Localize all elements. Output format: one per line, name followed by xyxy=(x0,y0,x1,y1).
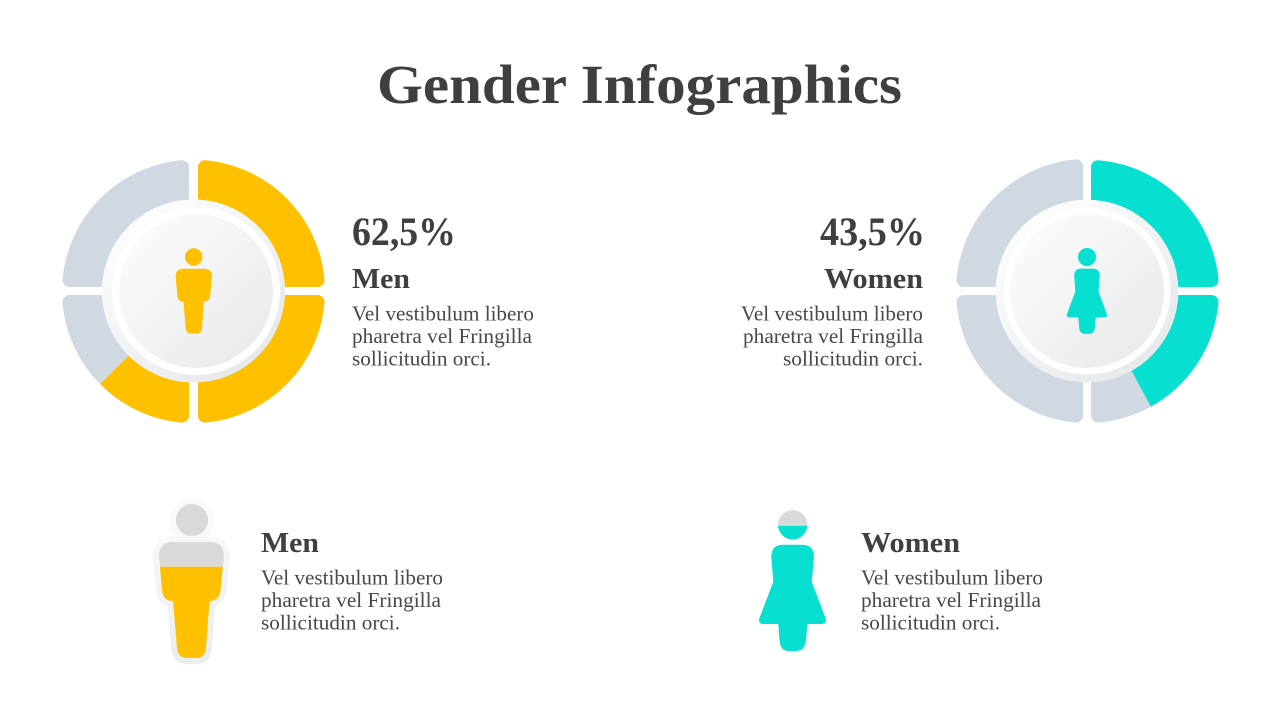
center disc xyxy=(102,199,285,383)
segment: bottom left grey xyxy=(956,295,1083,423)
text block: women description: pharetra vel Fringilla xyxy=(861,588,1042,612)
segment: bottom right teal xyxy=(1091,295,1218,407)
segment: bottom left yellow xyxy=(100,295,189,423)
segment: bottom left grey xyxy=(62,295,189,384)
text block: women stat xyxy=(741,209,925,370)
segment: top right teal xyxy=(1091,160,1218,287)
text block: women description xyxy=(861,527,1043,634)
text block: men description: Men xyxy=(261,527,319,559)
text block: women stat: 43,5% xyxy=(820,209,925,254)
text block: women stat: Vel vestibulum libero xyxy=(741,302,923,326)
segment: top left grey xyxy=(62,160,189,287)
text block: women description: Vel vestibulum libero xyxy=(861,566,1043,590)
text block: men stat: pharetra vel Fringilla xyxy=(352,324,533,348)
text block: women stat: sollicitudin orci. xyxy=(783,346,923,370)
text block: men description: pharetra vel Fringilla xyxy=(261,588,442,612)
segment: top right yellow xyxy=(198,160,324,287)
segment: top left grey xyxy=(956,159,1083,287)
text block: women stat: Women xyxy=(824,263,923,295)
text block: men description: sollicitudin orci. xyxy=(261,610,400,634)
segment: bottom right yellow xyxy=(198,295,324,423)
chart: men donut 62,5% xyxy=(62,160,324,423)
text block: men stat: 62,5% xyxy=(352,209,456,254)
text block: men stat: Men xyxy=(352,263,410,295)
text block: men stat: Vel vestibulum libero xyxy=(352,302,534,326)
icon: woman xyxy=(1067,248,1107,334)
text block: men stat: sollicitudin orci. xyxy=(352,346,491,370)
title: Gender Infographics xyxy=(377,54,902,115)
icon: man xyxy=(176,248,212,334)
icon: large woman figure xyxy=(759,510,826,651)
center disc xyxy=(996,200,1178,382)
text block: men description: Vel vestibulum libero xyxy=(261,566,443,590)
icon: large man figure xyxy=(159,498,224,658)
text block: women description: Women xyxy=(861,527,960,559)
text block: men stat xyxy=(352,209,534,370)
chart: women donut 43,5% xyxy=(956,159,1218,423)
segment: bottom right grey xyxy=(1091,295,1151,423)
text block: women stat: pharetra vel Fringilla xyxy=(743,324,924,348)
text block: women description: sollicitudin orci. xyxy=(861,610,1000,634)
text block: men description xyxy=(261,527,443,634)
